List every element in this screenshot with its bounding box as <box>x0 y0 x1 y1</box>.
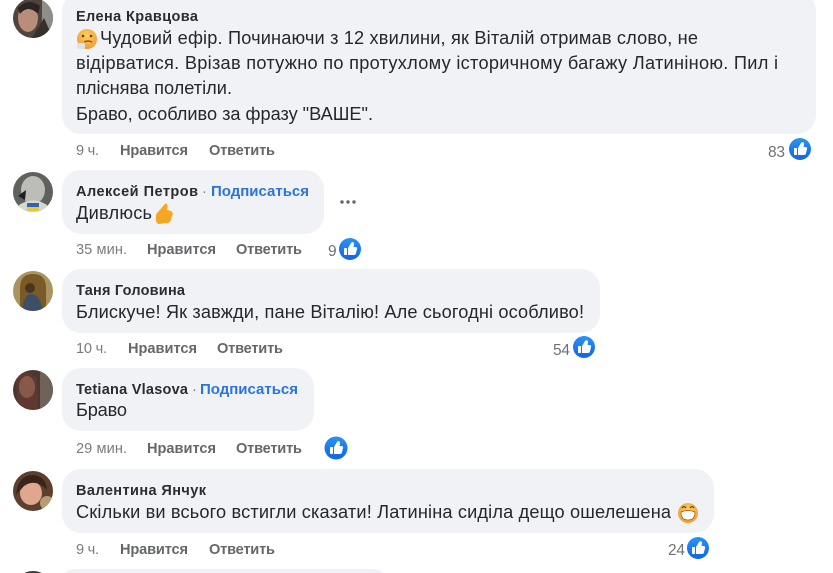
comment 4: Tetiana Vlasova <box>13 368 348 460</box>
avatar: Tetiana Vlasova <box>13 370 53 410</box>
comment 3: Таня Головина <box>13 269 600 359</box>
actions: 35 мин. <box>76 242 127 258</box>
actions <box>76 441 302 457</box>
comment text: Браво, особливо за фразу "ВАШЕ". <box>76 104 373 124</box>
like count: 83 <box>768 144 785 161</box>
author name and subscribe link <box>76 381 298 398</box>
comment text: Браво <box>76 400 127 420</box>
actions: Нравится <box>120 143 188 159</box>
author name and subscribe link: · <box>202 184 207 200</box>
actions: 9 ч. <box>76 542 99 558</box>
author name and subscribe link: Алексей Петров <box>76 184 198 200</box>
comment text: Блискуче! Як завжди, пане Віталію! Але сьогодні особливо! <box>76 302 584 322</box>
bubble <box>62 170 324 234</box>
comment text: Скільки ви всього встигли сказати! Латиніна сиділа дещо ошелешена <box>76 502 672 522</box>
bubble <box>62 368 314 431</box>
avatar: Валентина Янчук <box>13 471 54 511</box>
actions: Нравится <box>147 441 216 457</box>
actions: 29 мин. <box>76 441 127 457</box>
comment text <box>76 28 778 124</box>
actions: Ответить <box>217 341 283 357</box>
like count: 54 <box>553 342 570 359</box>
comment text: Чудовий ефір. Починаючи з 12 хвилини, як Віталій отримав слово, не <box>100 28 698 48</box>
actions: Ответить <box>209 143 275 159</box>
author name: Таня Головина <box>76 283 186 299</box>
author name: Валентина Янчук <box>76 483 207 499</box>
author name and subscribe link: Подписаться <box>200 381 298 398</box>
icon: grinning emoji <box>678 503 698 523</box>
author name and subscribe link: Tetiana Vlasova <box>76 382 189 398</box>
comment 6: cropped at bottom <box>13 569 386 573</box>
actions: Нравится <box>120 542 188 558</box>
icon: thumbs up emoji <box>156 204 173 224</box>
options dots <box>340 200 356 204</box>
actions <box>76 341 283 357</box>
icon: like <box>687 537 709 559</box>
avatar: Таня Головина <box>13 271 53 311</box>
bubble <box>62 269 600 333</box>
actions: Нравится <box>128 341 197 357</box>
icon: like <box>339 238 361 260</box>
author name and subscribe link: · <box>192 382 197 398</box>
actions: Ответить <box>209 542 275 558</box>
like count: 9 <box>328 243 337 260</box>
actions <box>76 542 275 558</box>
actions: 10 ч. <box>76 341 107 357</box>
comment text: Дивлюсь <box>76 203 152 223</box>
avatar: Алексей Петров <box>13 172 53 212</box>
comment text: відірватися. Врізав потужно по протухлому історичному багажу Латиніною. Пил і <box>76 53 778 73</box>
icon: like <box>324 436 348 460</box>
bubble <box>62 469 714 533</box>
like count: 24 <box>668 542 685 559</box>
avatar: Елена Кравцова <box>13 0 53 38</box>
icon: like <box>573 336 595 358</box>
author name and subscribe link <box>76 183 309 200</box>
actions: Нравится <box>147 242 216 258</box>
comment text: пліснява полетіли. <box>76 78 232 98</box>
bubble <box>62 569 386 573</box>
comment 1: Елена Кравцова <box>13 0 816 161</box>
actions: 9 ч. <box>76 143 99 159</box>
author name and subscribe link: Подписаться <box>211 183 309 200</box>
avatar: cropped <box>24 571 42 573</box>
icon: thinking emoji <box>77 29 97 49</box>
actions: Ответить <box>236 242 302 258</box>
actions: Ответить <box>236 441 302 457</box>
bubble <box>62 0 816 134</box>
icon: like <box>789 138 811 160</box>
comment 2: Алексей Петров <box>13 170 361 260</box>
comment 5: Валентина Янчук <box>13 469 714 559</box>
author name: Елена Кравцова <box>76 9 199 25</box>
actions <box>76 143 275 159</box>
actions <box>76 242 302 258</box>
